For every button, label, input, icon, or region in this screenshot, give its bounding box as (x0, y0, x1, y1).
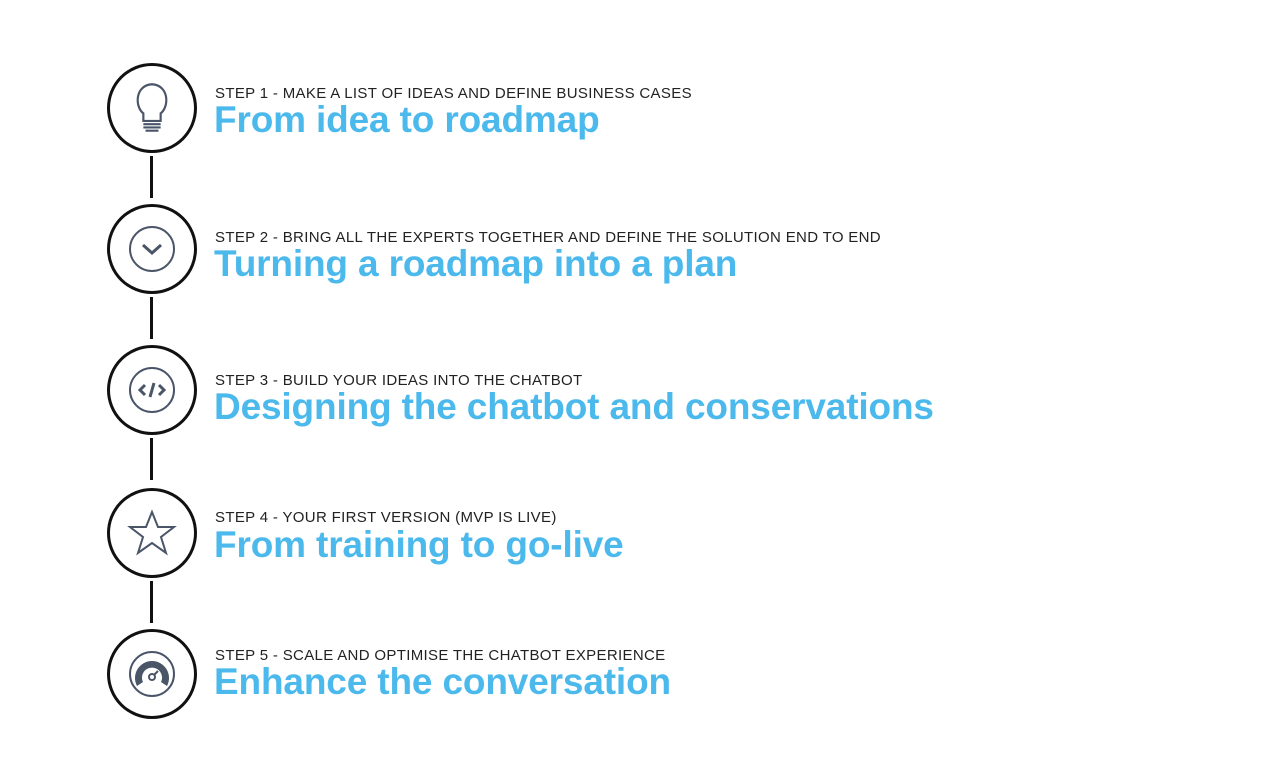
icon: code (107, 345, 197, 435)
text: STEP 4 - YOUR FIRST VERSION (MVP IS LIVE) (215, 509, 557, 526)
step 3 text (214, 372, 934, 427)
text: From idea to roadmap (214, 99, 600, 140)
icon: star (107, 488, 197, 578)
step 5 text (214, 647, 671, 702)
icon: speedometer (107, 629, 197, 719)
icon: lightbulb (107, 63, 197, 153)
text: STEP 3 - BUILD YOUR IDEAS INTO THE CHATBOT (215, 372, 583, 389)
text: From training to go-live (214, 524, 624, 565)
text: STEP 1 - MAKE A LIST OF IDEAS AND DEFINE BUSINESS CASES (215, 85, 692, 102)
text: STEP 2 - BRING ALL THE EXPERTS TOGETHER AND DEFINE THE SOLUTION END TO END (215, 229, 881, 246)
step 4 text (214, 509, 624, 565)
text: Enhance the conversation (214, 661, 671, 702)
icon: chevron circle (107, 204, 197, 294)
step 1 text (214, 85, 692, 140)
step 2 text (214, 229, 881, 284)
connector lines (150, 156, 153, 623)
text: STEP 5 - SCALE AND OPTIMISE THE CHATBOT EXPERIENCE (215, 647, 666, 664)
text: Designing the chatbot and conservations (214, 386, 934, 427)
text: Turning a roadmap into a plan (214, 243, 737, 284)
